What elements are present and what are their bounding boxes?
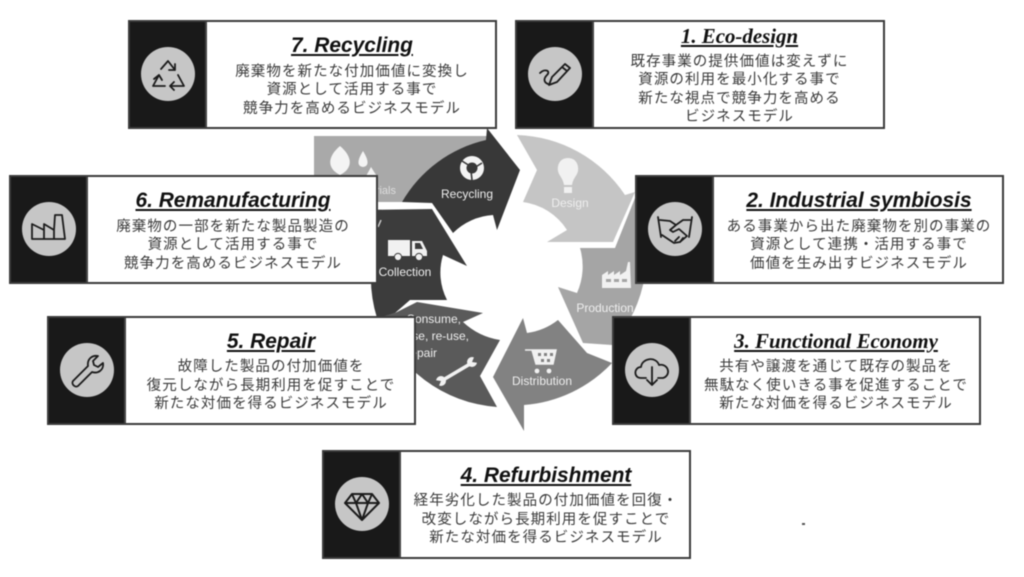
description bbox=[630, 52, 848, 125]
description: 競争力を高めるビジネスモデル bbox=[124, 256, 342, 272]
description: 新たな対価を得るビジネスモデル bbox=[719, 396, 953, 412]
arrow: consume, use, re-use, repair: repair bbox=[406, 346, 437, 360]
arrow: collection: Collection bbox=[379, 265, 431, 279]
arrow: consume, use, re-use, repair: Consume, bbox=[406, 312, 461, 326]
description: 新たな対価を得るビジネスモデル bbox=[429, 530, 663, 546]
heading: 6. Remanufacturing bbox=[135, 189, 330, 212]
description: ある事業から出た廃棄物を別の事業の bbox=[727, 218, 991, 234]
description: 資源の利用を最小化する事で bbox=[638, 72, 841, 88]
heading: 5. Repair bbox=[227, 330, 315, 353]
description: 廃棄物の一部を新たな製品製造の bbox=[116, 218, 350, 234]
description: 共有や譲渡を通じて既存の製品を bbox=[719, 359, 953, 375]
heading: 1. Eco-design bbox=[681, 24, 798, 48]
description: 廃棄物を新たな付加価値に変換し bbox=[235, 64, 469, 80]
arrow: consume, use, re-use, repair: use, re-use, bbox=[406, 329, 469, 343]
arrow: collection bbox=[360, 209, 467, 318]
heading: 4. Refurbishment bbox=[461, 464, 631, 487]
heading: 2. Industrial symbiosis bbox=[746, 189, 972, 212]
arrow: consume, use, re-use, repair bbox=[378, 302, 500, 407]
icon panel: cloud download bbox=[614, 318, 691, 423]
description: 改変しながら長期利用を促すことで bbox=[422, 512, 670, 528]
description: 新たな視点で競争力を高める bbox=[638, 91, 841, 107]
arrow: distribution bbox=[493, 318, 612, 431]
description: 新たな対価を得るビジネスモデル bbox=[154, 396, 388, 412]
card: 7. Recycling bbox=[128, 20, 497, 129]
description bbox=[414, 492, 678, 546]
description bbox=[235, 62, 469, 117]
raw materials segment bbox=[314, 136, 487, 202]
icon panel: handshake bbox=[637, 177, 714, 282]
description: 復元しながら長期利用を促すことで bbox=[147, 378, 395, 394]
arrow: production: Production bbox=[576, 301, 634, 315]
description: 故障した製品の付加価値を bbox=[178, 359, 364, 375]
card: 6. Remanufacturing bbox=[9, 175, 378, 284]
description: 資源として活用する事で bbox=[267, 82, 437, 98]
card: 1. Eco-design bbox=[515, 20, 885, 129]
arrow: distribution: Distribution bbox=[512, 374, 572, 388]
arrow: recycling bbox=[402, 128, 520, 233]
card: 5. Repair bbox=[47, 316, 416, 425]
description: 無駄なく使いきる事を促進することで bbox=[704, 378, 968, 394]
description: 価値を生み出すビジネスモデル bbox=[750, 256, 968, 272]
arrow: design: Design bbox=[551, 196, 589, 210]
icon panel: recycling bbox=[130, 22, 207, 127]
heading: 3. Functional Economy bbox=[734, 329, 938, 353]
icon panel: wrench bbox=[49, 318, 126, 423]
card: 3. Functional Economy bbox=[612, 316, 981, 425]
raw materials segment: Materials bbox=[351, 185, 396, 197]
icon panel: factory bbox=[11, 177, 88, 282]
arrow: design bbox=[517, 135, 635, 242]
description: 競争力を高めるビジネスモデル bbox=[243, 101, 461, 117]
description bbox=[146, 358, 395, 412]
description bbox=[116, 218, 350, 272]
description: 資源として連携・活用する事で bbox=[750, 237, 968, 253]
small mark bbox=[802, 523, 805, 525]
description: 既存事業の提供価値は変えずに bbox=[630, 54, 848, 70]
description: 資源として活用する事で bbox=[148, 237, 318, 253]
arrow: production bbox=[558, 198, 647, 345]
icon panel: diamond bbox=[324, 452, 401, 557]
description: 経年劣化した製品の付加価値を回復・ bbox=[414, 493, 678, 509]
icon panel: pen bbox=[517, 22, 594, 127]
description bbox=[727, 218, 991, 272]
description bbox=[704, 358, 968, 412]
card: 4. Refurbishment bbox=[322, 450, 691, 559]
card: 2. Industrial symbiosis bbox=[635, 175, 1004, 284]
arrow: recycling: Recycling bbox=[441, 187, 493, 201]
description: ビジネスモデル bbox=[685, 109, 794, 125]
heading: 7. Recycling bbox=[291, 34, 413, 57]
